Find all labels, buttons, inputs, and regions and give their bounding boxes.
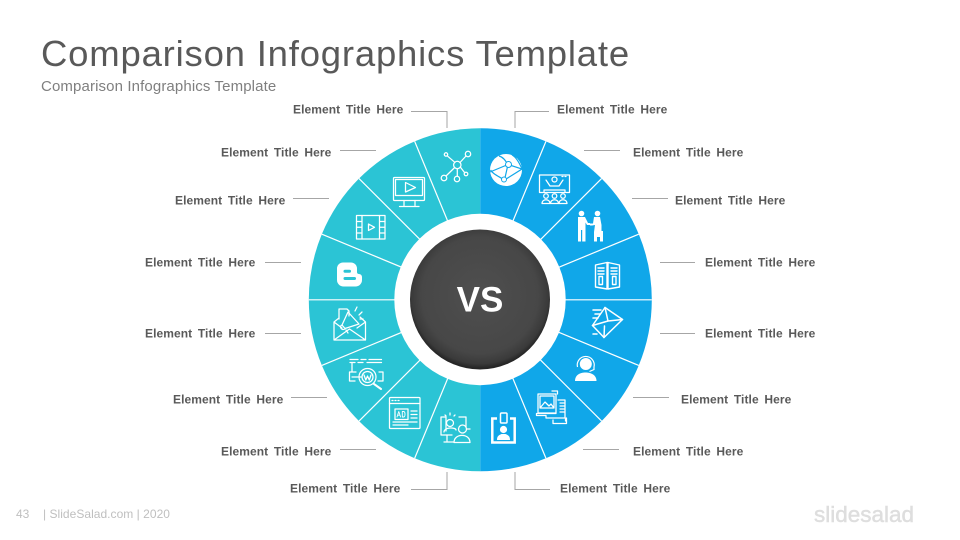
label R2: Element Title Here (633, 146, 744, 160)
label L4: Element Title Here (145, 256, 256, 270)
right labels (515, 102, 816, 496)
label L6: Element Title Here (173, 392, 284, 406)
centre VS badge: VS (457, 280, 503, 320)
icon: id badge (492, 413, 515, 442)
label R3: Element Title Here (675, 194, 786, 208)
label L3: Element Title Here (175, 194, 286, 208)
logo wordmark: slidesalad (814, 502, 914, 527)
right half segments (480, 128, 652, 471)
label L1: Element Title Here (293, 102, 404, 116)
label L8 (290, 472, 447, 496)
left labels (145, 102, 447, 496)
icon: gallery documents (536, 391, 566, 424)
wheel chart (309, 128, 652, 471)
icon: search W (350, 360, 383, 389)
icon: network (441, 151, 471, 182)
label L1 (293, 102, 447, 128)
label L2: Element Title Here (221, 146, 332, 160)
label R6: Element Title Here (681, 392, 792, 406)
footer credit: | SlideSalad.com | 2020 (43, 507, 170, 521)
title: Comparison Infographics Template (41, 33, 630, 74)
label R7: Element Title Here (633, 444, 744, 458)
label R1 (515, 102, 668, 128)
icon: handshake (578, 211, 603, 242)
label R8: Element Title Here (560, 482, 671, 496)
label L7: Element Title Here (221, 444, 332, 458)
left half segments (309, 128, 480, 471)
icon: video monitor (394, 178, 424, 206)
icon: film strip (356, 216, 385, 239)
label L8: Element Title Here (290, 482, 401, 496)
icon: AD window (390, 398, 420, 428)
centre VS badge (410, 230, 550, 370)
icon: presentation audience (540, 175, 570, 204)
icon: mail send (592, 308, 622, 338)
footer page number: 43 (16, 507, 30, 521)
label L5: Element Title Here (145, 326, 256, 340)
centre white ring (394, 214, 566, 385)
label R1: Element Title Here (557, 102, 668, 116)
icon: blogger (337, 262, 362, 286)
icon: headset agent (575, 356, 596, 381)
label R8 (515, 472, 671, 496)
icon: webinar people (441, 413, 470, 442)
icon: globe (490, 154, 522, 186)
label R4: Element Title Here (705, 256, 816, 270)
icon: open book (596, 262, 620, 289)
subtitle: Comparison Infographics Template (41, 78, 276, 95)
icon: envelope with megaphone (334, 307, 366, 340)
label R5: Element Title Here (705, 326, 816, 340)
